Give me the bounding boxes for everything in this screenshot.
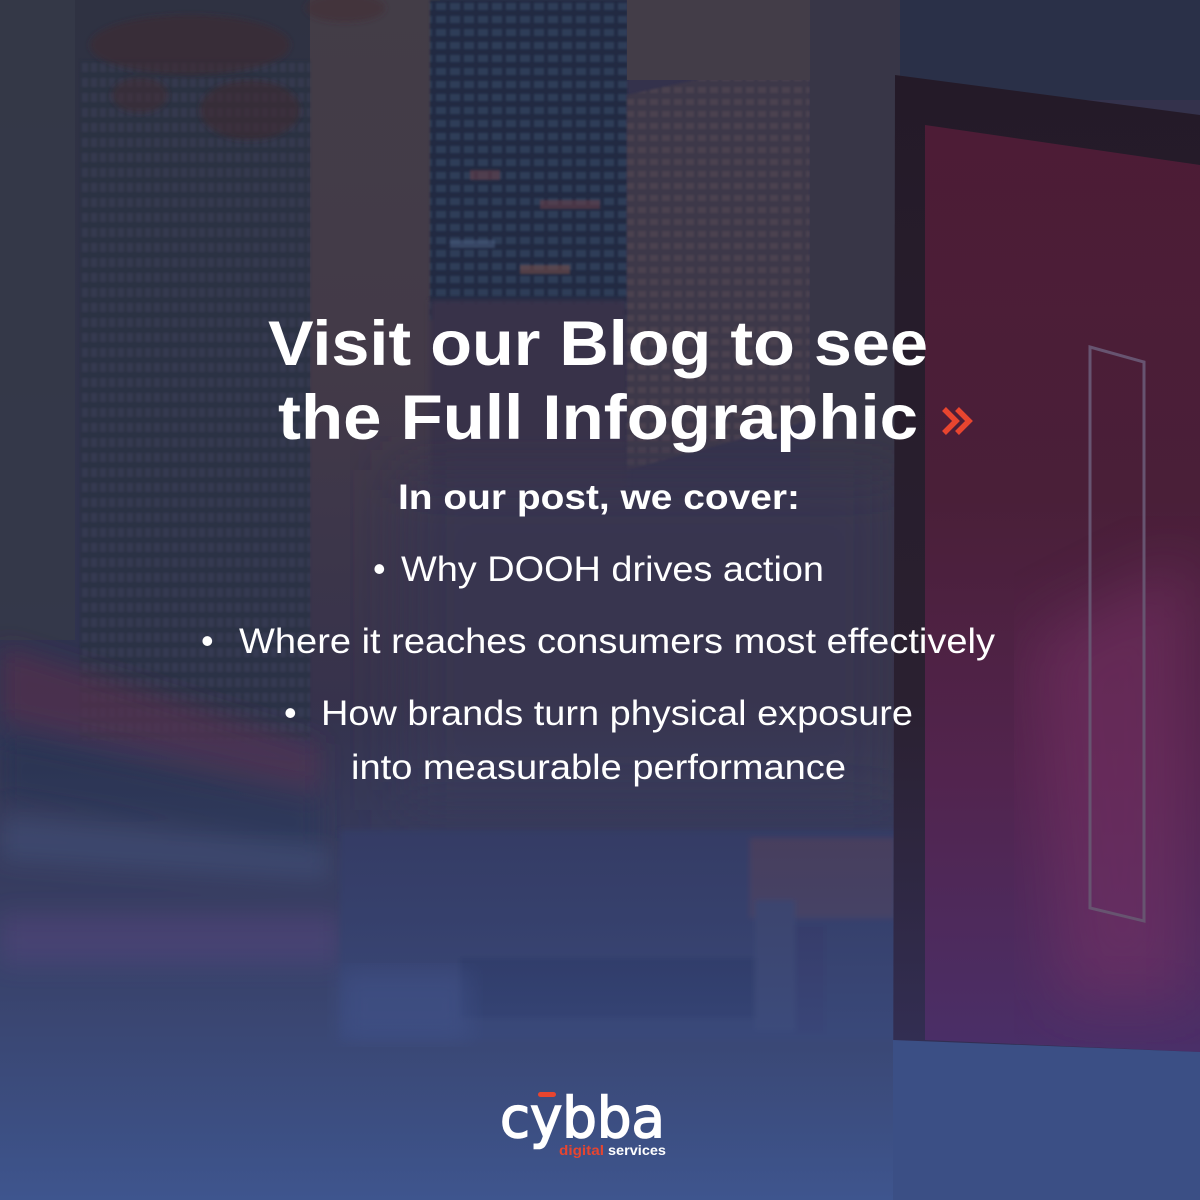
bullet: why DOOH drives action: Why DOOH drives action bbox=[401, 550, 824, 589]
bullet: where it reaches consumers: Where it reaches consumers most effectively bbox=[239, 622, 996, 661]
bullet: physical exposure to performance bbox=[284, 692, 913, 787]
bullet: why DOOH drives action: • bbox=[373, 548, 386, 589]
plaza and people bbox=[340, 830, 900, 1040]
icon: double chevron arrow bbox=[944, 409, 969, 433]
heading: Visit our Blog to see bbox=[268, 309, 928, 379]
logo: cybba digital services: digital bbox=[559, 1142, 604, 1158]
bullet: where it reaches consumers: • bbox=[201, 620, 214, 661]
logo: cybba digital services: services bbox=[608, 1142, 666, 1158]
logo: cybba digital services: cybba bbox=[500, 1086, 665, 1151]
bullet: physical exposure to performance: • bbox=[284, 692, 297, 733]
building window lights bbox=[450, 170, 770, 288]
heading: the Full Infographic bbox=[278, 383, 918, 453]
bullet: physical exposure to performance: How brands turn physical exposure bbox=[321, 694, 913, 733]
street streaks bbox=[0, 645, 340, 965]
heading bbox=[268, 309, 928, 453]
billboard bbox=[893, 75, 1200, 1200]
subheading: In our post, we cover: bbox=[398, 478, 800, 517]
tree foliage bbox=[90, 0, 385, 140]
bullet list bbox=[201, 548, 996, 787]
bullet: physical exposure to performance: into measurable performance bbox=[351, 748, 846, 787]
